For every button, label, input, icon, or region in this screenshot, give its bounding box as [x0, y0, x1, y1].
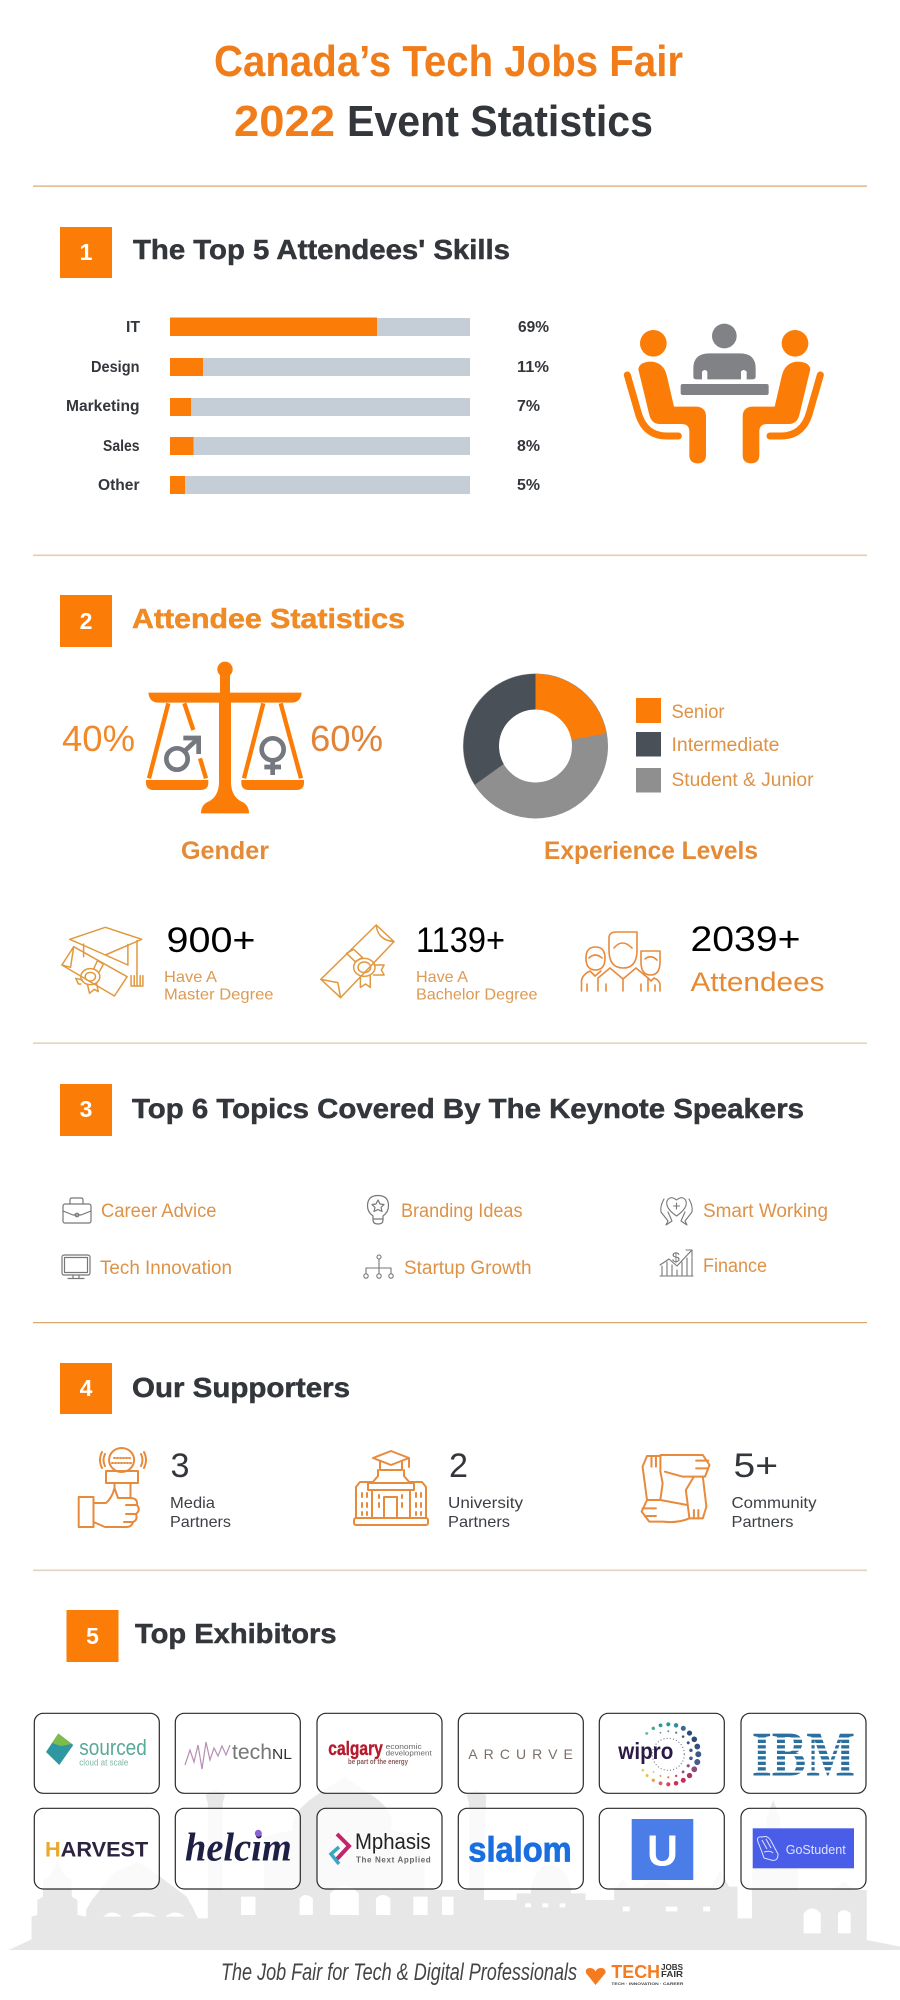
logo card: sourced — [34, 1713, 159, 1793]
panel: attendee statistics — [60, 595, 824, 1004]
gender percentages — [62, 718, 383, 759]
title — [214, 37, 683, 146]
stat: media partners: Media — [170, 1495, 215, 1512]
topic: career advice: Career Advice — [101, 1201, 216, 1222]
stat: attendees: 2039+ — [690, 920, 800, 959]
stat: university partners: University — [448, 1495, 523, 1512]
legend: experience levels: Intermediate — [672, 735, 780, 756]
icon: org chart — [364, 1255, 393, 1278]
icon: briefcase — [63, 1198, 91, 1223]
logo card: Mphasis — [317, 1808, 442, 1889]
topic: startup growth — [364, 1255, 532, 1279]
panel: keynote topics — [60, 1084, 828, 1279]
logo: Tech Jobs Fair: TECH — [611, 1962, 660, 1982]
topic: tech innovation: Tech Innovation — [100, 1258, 232, 1279]
stat: bachelor degree: Bachelor Degree — [416, 986, 538, 1004]
bar chart: skills: 8% — [517, 438, 540, 455]
section number 1: 1 — [80, 239, 93, 265]
topic: career advice — [63, 1198, 216, 1223]
logo card: Slalom — [458, 1808, 583, 1889]
title: Canada’s Tech Jobs Fair — [214, 37, 683, 86]
icon: heart — [586, 1968, 606, 1985]
title: Event Statistics — [347, 97, 653, 146]
stat: university partners: Partners — [448, 1514, 510, 1531]
topic: finance: $ — [672, 1249, 680, 1265]
logo card: calgary — [317, 1713, 442, 1793]
icon: interlocked hands — [642, 1455, 710, 1522]
topic: smart working: Smart Working — [703, 1201, 828, 1222]
stat: master degree: Have A — [164, 969, 217, 986]
stat: media partners: 3 — [170, 1447, 190, 1485]
heading: our supporters: Our Supporters — [132, 1372, 350, 1403]
stat: media partners — [79, 1447, 231, 1531]
legend: experience levels — [636, 698, 814, 792]
heading: topics: Top 6 Topics Covered By The Keynote Speakers — [132, 1093, 804, 1124]
background skyline silhouette — [9, 1777, 900, 1950]
logo card: U: U — [647, 1827, 678, 1876]
logo card: Slalom: slalom — [468, 1831, 572, 1870]
logo card: Mphasis: Mphasis — [355, 1829, 431, 1854]
stat: bachelor degree — [321, 921, 538, 1004]
logo card: sourced: sourced — [79, 1735, 147, 1760]
stat: community partners: Partners — [732, 1514, 794, 1531]
title: 2022 — [234, 97, 335, 146]
logo card: techNL: tech — [232, 1741, 272, 1764]
icon: monitor — [62, 1255, 90, 1278]
icon: finance growth chart — [660, 1250, 693, 1276]
logo card: GoStudent — [741, 1808, 866, 1889]
stat: attendees: Attendees — [690, 967, 824, 997]
donut chart: experience levels — [464, 674, 606, 800]
bar chart: skills: Marketing — [66, 398, 140, 415]
section number 2 — [60, 595, 112, 647]
section number 4 — [60, 1363, 112, 1414]
stat: bachelor degree: 1139+ — [416, 921, 505, 960]
icon: heart in hands — [661, 1198, 692, 1225]
bar chart: skills: Design — [91, 359, 140, 376]
section number 2: 2 — [80, 608, 92, 634]
bar chart: skills: IT — [126, 319, 140, 336]
icon: university building — [354, 1451, 428, 1525]
icon: hand holding microphone — [79, 1448, 146, 1527]
logo card: techNL — [175, 1713, 300, 1793]
icon: group of people — [582, 932, 660, 991]
panel: our supporters — [60, 1363, 816, 1531]
stat: attendees — [582, 920, 824, 997]
logo card: Harvest: HARVEST — [45, 1839, 148, 1862]
footer tagline: The Job Fair for Tech & Digital Professionals — [221, 1959, 577, 1986]
logo card: U — [599, 1808, 724, 1889]
icon: people meeting at table — [627, 324, 820, 463]
section number 1 — [60, 227, 112, 278]
logo card: Mphasis: The Next Applied — [356, 1855, 431, 1864]
panel: top exhibitors — [34, 1610, 866, 1889]
logo card: calgary: economic — [386, 1744, 422, 1751]
legend: experience levels: Student & Junior — [672, 770, 814, 791]
bar chart: skills: Sales — [103, 438, 140, 455]
topic: smart working — [661, 1198, 828, 1225]
logo card: Harvest — [34, 1808, 159, 1889]
icon: graduation cap and diploma — [62, 927, 143, 996]
section number 3 — [60, 1084, 112, 1136]
logo card: Arcurve: ARCURVE — [468, 1746, 573, 1762]
stat: community partners: Community — [732, 1495, 816, 1512]
logo card: Wipro: wipro — [617, 1738, 673, 1764]
section number 4: 4 — [80, 1375, 93, 1401]
logo: Tech Jobs Fair: TECH · INNOVATION · CAREER — [611, 1981, 684, 1986]
stat: community partners: 5+ — [734, 1447, 778, 1485]
topic: finance: Finance — [703, 1256, 767, 1277]
icon: diploma scroll — [321, 925, 394, 998]
stat: master degree — [62, 921, 274, 1004]
logo card: Helcim: helcim — [185, 1825, 292, 1870]
heading: attendee statistics: Attendee Statistics — [132, 603, 405, 634]
bar chart: skills: Other — [98, 477, 140, 494]
heading: top exhibitors: Top Exhibitors — [135, 1618, 336, 1649]
topic: branding ideas: Branding Ideas — [401, 1201, 522, 1222]
icon: light bulb with star — [368, 1196, 388, 1224]
section number 5: 5 — [86, 1623, 99, 1649]
section number 3: 3 — [80, 1096, 92, 1122]
logo card: Helcim — [175, 1808, 300, 1889]
bar chart: skills: 69% — [518, 319, 549, 336]
logo card: calgary: be part of the energy — [348, 1759, 408, 1766]
panel: top 5 attendees' skills — [60, 227, 820, 494]
stat: community partners — [642, 1447, 816, 1531]
topic: tech innovation — [62, 1255, 232, 1279]
logo: Tech Jobs Fair: JOBS — [661, 1962, 683, 1972]
topic: finance — [660, 1249, 767, 1277]
stat: media partners: Partners — [170, 1514, 231, 1531]
topic: branding ideas — [368, 1196, 522, 1224]
topic: startup growth: Startup Growth — [404, 1258, 532, 1279]
logo card: Wipro — [599, 1713, 724, 1793]
logo card: sourced: cloud at scale — [79, 1758, 128, 1768]
bar chart: skills: 5% — [517, 477, 540, 494]
logo card: calgary: calgary — [328, 1739, 383, 1760]
logo card: techNL: NL — [272, 1746, 292, 1763]
bar chart: skills: 11% — [517, 359, 549, 376]
section number 5 — [66, 1610, 118, 1662]
logo: Tech Jobs Fair — [611, 1962, 684, 1986]
stat: master degree: 900+ — [166, 921, 256, 960]
heading: skills: The Top 5 Attendees' Skills — [133, 234, 510, 265]
label: experience levels: Experience Levels — [544, 837, 758, 865]
logo card: Arcurve — [458, 1713, 583, 1793]
bar chart: skills — [66, 318, 549, 494]
logo card: IBM: IBM — [752, 1718, 855, 1790]
logo card: GoStudent: GoStudent — [786, 1842, 846, 1857]
label: gender: Gender — [181, 837, 269, 865]
stat: bachelor degree: Have A — [416, 969, 468, 986]
stat: university partners: 2 — [449, 1447, 468, 1485]
stat: university partners — [354, 1447, 523, 1531]
logo: Tech Jobs Fair: FAIR — [661, 1969, 683, 1979]
logo card: calgary: development — [386, 1750, 432, 1758]
icon: gender balance scale — [146, 662, 304, 813]
gender percentages: 40% — [62, 718, 135, 759]
legend: experience levels: Senior — [672, 702, 725, 723]
gender percentages: 60% — [310, 718, 383, 759]
stat: master degree: Master Degree — [164, 986, 274, 1004]
bar chart: skills: 7% — [517, 398, 540, 415]
